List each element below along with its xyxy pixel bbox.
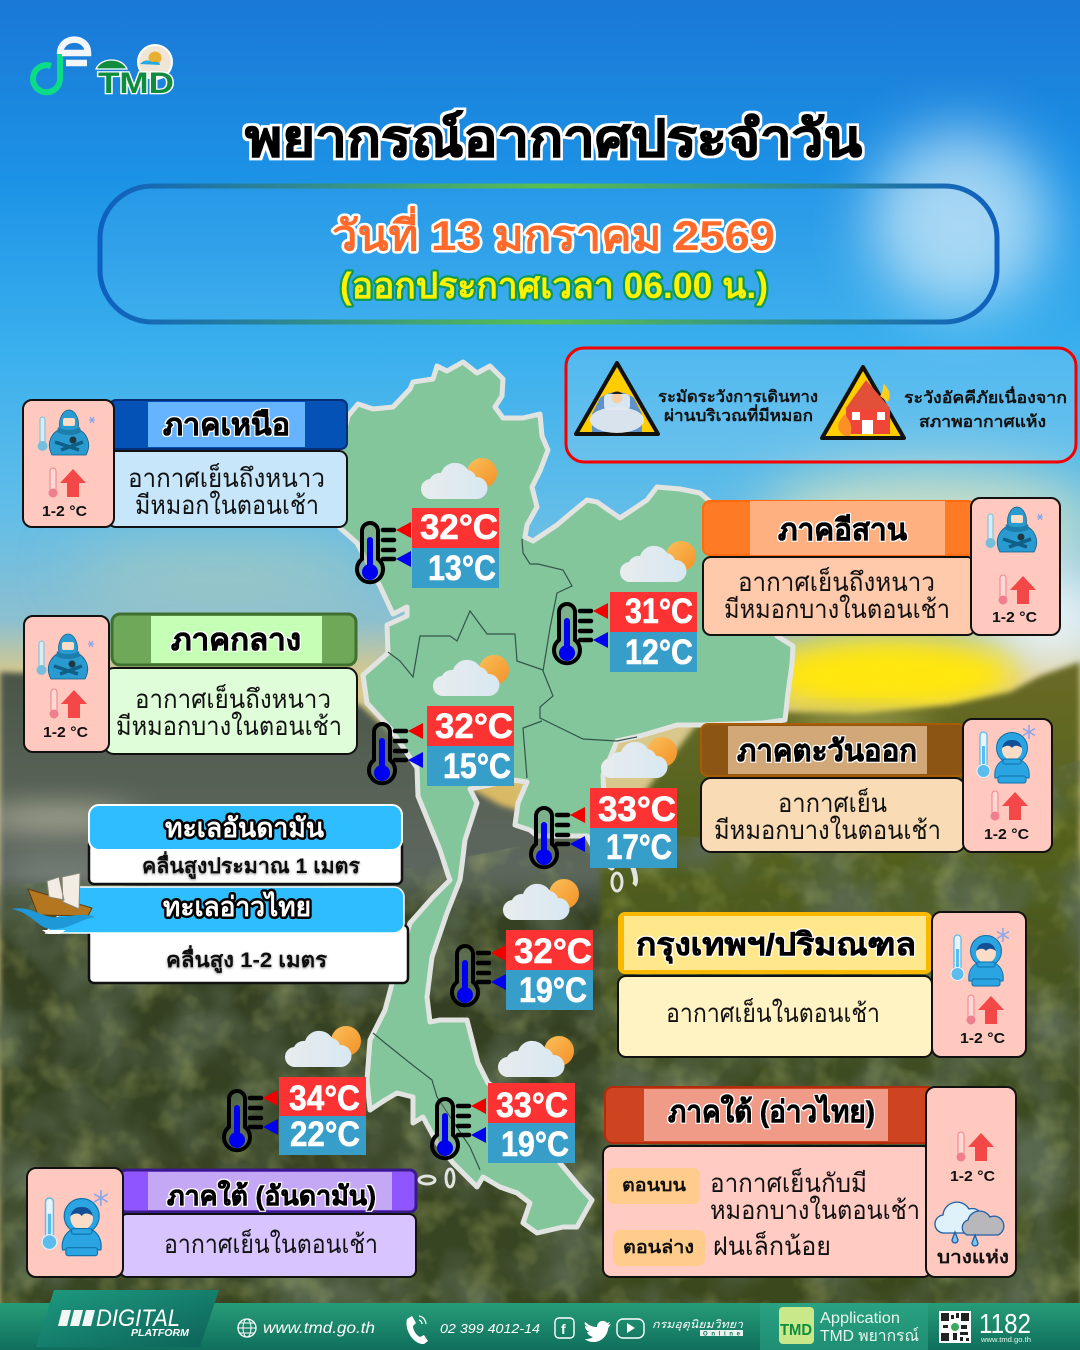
upper part label	[607, 1168, 700, 1204]
department name: Online	[703, 1332, 741, 1338]
panel: south gulf: ภาคใต้ (อ่าวไทย)	[668, 1094, 875, 1129]
panel: bangkok and vicinity: 1-2 °C	[960, 1030, 1005, 1047]
panel: gulf of thailand sea: คลื่นสูง 1-2 เมตร	[166, 944, 328, 974]
icon: fog driving warning	[576, 363, 658, 434]
app icon and label: TMD พยากรณ์	[820, 1326, 919, 1345]
phone: 02 399 4012-14	[440, 1321, 540, 1336]
temperature: south andaman: 34°C	[289, 1079, 360, 1118]
app icon and label: TMD	[780, 1322, 812, 1339]
warning text: fire: ระวังอัคคีภัยเนื่องจาก	[904, 386, 1067, 407]
icon: fire warning	[822, 367, 904, 438]
upper part label: ตอนบน	[622, 1175, 687, 1195]
temperature: northeast: 12°C	[625, 633, 693, 672]
panel: northeast	[703, 498, 1060, 635]
warning text: fog: ระมัดระวังการเดินทาง	[658, 388, 818, 406]
issue time: (ออกประกาศเวลา 06.00 น.)	[340, 265, 768, 306]
warning text: fire	[904, 386, 1067, 431]
app icon and label	[779, 1307, 919, 1345]
panel: south andaman: ภาคใต้ (อันดามัน)	[167, 1180, 376, 1211]
temperature: east	[531, 737, 677, 868]
temperature: northeast: 31°C	[625, 592, 693, 631]
department name: กรมอุตุนิยมวิทยา	[652, 1319, 744, 1331]
panel: bangkok and vicinity: อากาศเย็นในตอนเช้า	[666, 997, 880, 1028]
temperature: south gulf: 19°C	[501, 1125, 569, 1164]
temperature: south gulf	[432, 1036, 575, 1164]
warning text: fire: สภาพอากาศแห้ง	[919, 413, 1046, 431]
hotline 1182: 1182	[979, 1308, 1031, 1339]
digital platform badge: DIGITAL	[96, 1305, 180, 1332]
panel: east: ภาคตะวันออก	[737, 735, 917, 768]
panel: northeast: มีหมอกบางในตอนเช้า	[724, 594, 950, 624]
temperature: upper south: 32°C	[514, 932, 592, 971]
warning panel	[566, 348, 1076, 462]
temperature: central: 32°C	[435, 707, 513, 746]
panel: northeast: 1-2 °C	[992, 609, 1037, 626]
temperature: south andaman: 22°C	[290, 1115, 360, 1154]
temperature: central: 15°C	[443, 747, 511, 786]
panel: south gulf: หมอกบางในตอนเช้า	[710, 1195, 920, 1225]
panel: central: ภาคกลาง	[171, 624, 301, 657]
phone	[406, 1316, 540, 1344]
logo: digital platform and TMD: TMD	[98, 67, 174, 100]
social icons	[555, 1318, 644, 1342]
panel: bangkok and vicinity	[618, 912, 1026, 1057]
temperature: central	[369, 655, 514, 786]
panel: north: อากาศเย็นถึงหนาว	[128, 462, 325, 493]
panel: south andaman	[27, 1168, 416, 1277]
temperature: south gulf: 33°C	[496, 1086, 568, 1125]
panel: andaman sea: คลื่นสูงประมาณ 1 เมตร	[142, 850, 361, 880]
panel: south gulf: อากาศเย็นกับมี	[710, 1167, 867, 1198]
logo: digital platform and TMD	[33, 40, 174, 100]
panel: south gulf: 1-2 °C	[950, 1168, 995, 1185]
hotline 1182: www.tmd.go.th	[980, 1337, 1031, 1344]
panel: northeast: ภาคอีสาน	[778, 514, 907, 547]
icon: rain cloud	[935, 1202, 1004, 1246]
warning text: fog: ผ่านบริเวณที่มีหมอก	[664, 404, 813, 425]
panel: central	[24, 614, 357, 754]
date panel	[100, 186, 997, 322]
QR code	[939, 1311, 971, 1343]
panel: north: ภาคเหนือ	[163, 409, 290, 442]
lower part label: ตอนล่าง	[623, 1237, 694, 1257]
map of Thailand	[335, 362, 793, 1233]
panel: south gulf	[603, 1087, 1016, 1277]
temperature: east: 17°C	[606, 828, 672, 867]
title: พยากรณ์อากาศประจำวัน	[245, 110, 862, 167]
panel: north	[23, 400, 347, 527]
panel: east: 1-2 °C	[984, 826, 1029, 843]
temperature: north: 13°C	[428, 549, 496, 588]
social icons: f	[561, 1321, 566, 1337]
panel: south gulf: ฝนเล็กน้อย	[713, 1230, 831, 1261]
panel: east: มีหมอกบางในตอนเช้า	[714, 815, 941, 845]
panel: gulf of thailand sea: ทะเลอ่าวไทย	[163, 891, 311, 922]
temperature: upper south	[452, 879, 593, 1010]
panel: central: มีหมอกบางในตอนเช้า	[116, 711, 342, 741]
panel: central: อากาศเย็นถึงหนาว	[135, 683, 331, 714]
panel: central: 1-2 °C	[43, 724, 88, 741]
website: www.tmd.go.th	[263, 1320, 375, 1337]
lower part label	[613, 1230, 705, 1266]
date: วันที่ 13 มกราคม 2569	[332, 206, 775, 259]
panel: south gulf: บางแห่ง	[937, 1247, 1009, 1267]
app icon and label: Application	[820, 1310, 900, 1327]
temperature: upper south: 19°C	[519, 971, 587, 1010]
temperature: east: 33°C	[598, 790, 676, 829]
panel: andaman sea	[89, 805, 402, 884]
panel: north: มีหมอกในตอนเช้า	[135, 490, 319, 520]
digital platform badge	[36, 1290, 219, 1347]
panel: andaman sea: ทะเลอันดามัน	[165, 813, 325, 843]
temperature: northeast	[554, 541, 697, 672]
panel: north: 1-2 °C	[42, 503, 87, 520]
temperature: north: 32°C	[420, 508, 498, 547]
temperature: north	[357, 458, 499, 588]
panel: northeast: อากาศเย็นถึงหนาว	[738, 566, 935, 597]
temperature: south andaman	[224, 1026, 366, 1155]
department name	[652, 1319, 744, 1338]
warning text: fog	[658, 388, 818, 425]
icon: boat	[12, 873, 95, 934]
digital platform badge: PLATFORM	[131, 1328, 190, 1339]
panel: east	[701, 719, 1052, 852]
panel: bangkok and vicinity: กรุงเทพฯ/ปริมณฑล	[636, 927, 916, 964]
panel: south andaman: อากาศเย็นในตอนเช้า	[164, 1228, 378, 1259]
panel: east: อากาศเย็น	[778, 787, 887, 818]
panel: gulf of thailand sea	[46, 887, 408, 983]
footer bar	[0, 1290, 1080, 1350]
